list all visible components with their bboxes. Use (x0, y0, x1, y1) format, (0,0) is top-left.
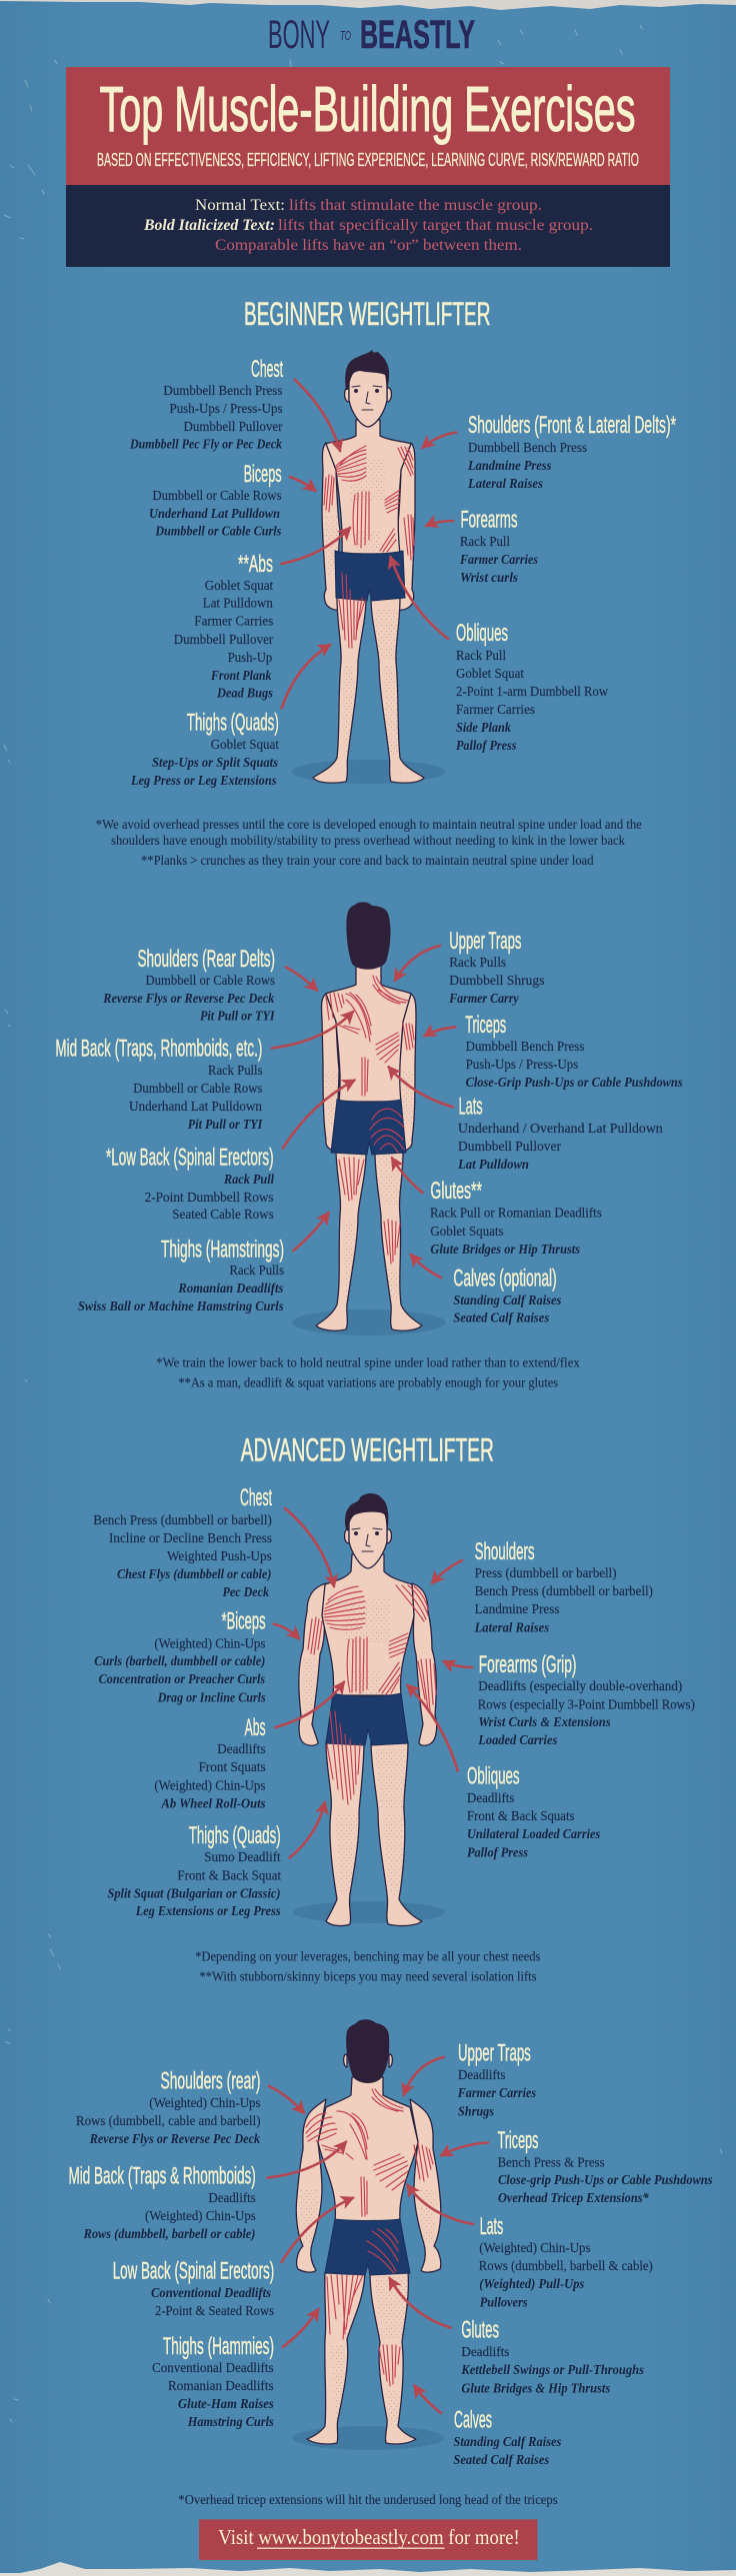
lift list: Deadlifts (208, 2191, 256, 2206)
navy legend band (66, 185, 670, 267)
lift list: Romanian Deadlifts (168, 2379, 274, 2394)
lift list: Dumbbell Shrugs (449, 974, 544, 989)
lift list (94, 1636, 266, 1705)
callout: shoulders rear advanced (76, 2067, 261, 2147)
callout: shoulders front (467, 412, 676, 492)
lift list: Dumbbell Bench Press (468, 441, 587, 456)
heading: calves: Calves (454, 2407, 492, 2434)
legend text (143, 197, 593, 254)
lift list: Concentration or Preacher Curls (99, 1672, 266, 1687)
lift list: Dumbbell or Cable Rows (146, 974, 275, 989)
right leg (371, 1742, 422, 1926)
lift list: Curls (barbell, dumbbell or cable) (94, 1654, 265, 1669)
shorts (326, 1693, 408, 1745)
heading: forearms: Forearms (460, 506, 518, 533)
lift list: Deadlifts (especially double-overhand) (478, 1679, 683, 1694)
hair (345, 350, 389, 390)
lift list (477, 1679, 695, 1748)
callout: biceps (149, 461, 282, 540)
callout: triceps advanced (498, 2127, 713, 2206)
heading: beginner weightlifter: BEGINNER WEIGHTLIFTER (244, 296, 490, 332)
left leg (307, 2272, 365, 2444)
lift list: Dumbbell or Cable Rows (152, 489, 282, 504)
lift list: Pit Pull or TYI (200, 1010, 275, 1025)
right arm (392, 443, 415, 610)
footnotes: beginner front (96, 818, 642, 869)
heading: abs: **Abs (238, 551, 273, 578)
hair (346, 902, 390, 970)
lift list: (Weighted) Chin-Ups (479, 2241, 590, 2256)
lift list: Goblet Squat (456, 667, 524, 682)
lift list: Conventional Deadlifts (151, 2286, 271, 2301)
lift list: Leg Extensions or Leg Press (135, 1904, 281, 1919)
lift list: Step-Ups or Split Squats (152, 756, 278, 771)
heading: triceps: Triceps (498, 2127, 538, 2154)
footnotes: beginner front: shoulders have enough mobility/stability to press overhead without needing to kink in the lower back (111, 834, 625, 849)
lift list: Dumbbell Pec Fly or Pec Deck (129, 438, 282, 452)
lift list: Incline or Decline Bench Press (109, 1531, 272, 1546)
ears (344, 388, 392, 402)
heading: hamstrings: Thighs (Hamstrings) (161, 1236, 284, 1263)
lift list: Underhand / Overhand Lat Pulldown (458, 1122, 663, 1137)
lift list: Deadlifts (217, 1742, 266, 1757)
lift list: Front Squats (199, 1760, 266, 1775)
lift list (154, 1742, 266, 1811)
lift list: Front & Back Squats (467, 1809, 574, 1824)
lift list: Rows (dumbbell, cable and barbell) (76, 2114, 261, 2129)
lift list (151, 2286, 274, 2319)
ears (344, 2054, 392, 2067)
lift list: Lat Pulldown (203, 597, 273, 612)
footnote: advanced back: *Overhead tricep extensions will hit the underused long head of the triceps (178, 2493, 558, 2508)
torso (318, 2077, 418, 2221)
heading: shoulders rear delts: Shoulders (Rear Delts) (138, 946, 275, 973)
callout: low back advanced (113, 2258, 274, 2319)
torso (326, 965, 411, 1102)
lift list: Bench Press (dumbbell or barbell) (475, 1584, 653, 1599)
lift list (466, 1040, 683, 1091)
callout: lats advanced (479, 2213, 653, 2310)
lift list: Glute-Ham Raises (178, 2397, 274, 2412)
lift list: Dead Bugs (216, 687, 273, 702)
lift list: Wrist curls (460, 571, 519, 586)
figure: beginner front (292, 350, 446, 784)
lift list: 2-Point & Seated Rows (155, 2304, 274, 2319)
footnotes: beginner back: **As a man, deadlift & squat variations are probably enough for your glutes (178, 1376, 558, 1391)
lift list: Drag or Incline Curls (157, 1690, 266, 1705)
lift list (453, 1293, 562, 1326)
lift list: Ab Wheel Roll-Outs (161, 1797, 266, 1811)
lift list (457, 1122, 663, 1173)
lift list: Hamstring Curls (187, 2415, 274, 2430)
body hair stipple (325, 460, 400, 755)
lift list: Leg Press or Leg Extensions (130, 774, 277, 789)
callout: forearms grip (477, 1651, 695, 1748)
lift list (474, 1566, 653, 1635)
lift list (461, 2345, 644, 2396)
lift list (459, 535, 538, 586)
lift list: Romanian Deadlifts (177, 1282, 284, 1296)
lift list: Rack Pulls (230, 1264, 284, 1279)
heading: shoulders: Shoulders (475, 1538, 535, 1565)
legend text: lifts that specifically target that muscle group. (278, 217, 593, 234)
shorts (325, 2219, 410, 2275)
arrows: beginner front (282, 380, 456, 708)
lift list: Sumo Deadlift (204, 1850, 281, 1865)
right arm (412, 1583, 437, 1745)
heading: mid back: Mid Back (Traps, Rhomboids, etc.) (55, 1036, 262, 1063)
lift list: Dumbbell or Cable Rows (133, 1082, 262, 1097)
call to action banner: Visit www.bonytobeastly.com for more! (218, 2525, 520, 2549)
lift list: Farmer Carries (194, 615, 273, 630)
lift list: Lateral Raises (474, 1620, 550, 1635)
lift list: Weighted Push-Ups (167, 1549, 272, 1564)
lift list: Dumbbell Pullover (184, 420, 283, 435)
lift list: Shrugs (458, 2104, 494, 2119)
lift list (479, 2241, 653, 2310)
callout: obliques (456, 620, 609, 754)
callout: thighs quads (130, 710, 279, 789)
shorts (331, 1100, 406, 1155)
lift list: Rows (dumbbell, barbell & cable) (479, 2259, 653, 2274)
muscle hatching (324, 446, 414, 648)
callout: mid back (55, 1036, 263, 1133)
lift list: Rows (especially 3-Point Dumbbell Rows) (478, 1697, 695, 1712)
heading: lats: Lats (480, 2213, 503, 2240)
lift list: Deadlifts (467, 1791, 514, 1806)
lift list (145, 1173, 274, 1223)
callout: biceps advanced (94, 1607, 266, 1705)
muscle hatching (326, 976, 414, 1264)
lift list: Dumbbell Pullover (174, 633, 274, 648)
lift list: Underhand Lat Pulldown (149, 507, 280, 522)
lift list (108, 1850, 281, 1919)
callout: calves optional (453, 1266, 562, 1326)
lift list (129, 1064, 263, 1133)
lift list (93, 1513, 272, 1600)
lift list: Close-Grip Push-Ups or Cable Pushdowns (466, 1076, 683, 1091)
lift list: 2-Point Dumbbell Rows (145, 1191, 274, 1206)
ground shadow (292, 2426, 444, 2450)
lift list: Rack Pull or Romanian Deadlifts (430, 1207, 602, 1222)
lift list (152, 2361, 274, 2430)
lift list (129, 384, 283, 452)
callout: chest advanced (93, 1484, 272, 1600)
lift list: Reverse Flys or Reverse Pec Deck (102, 992, 274, 1007)
lift list (467, 441, 587, 492)
lift list: Bench Press (dumbbell or barbell) (93, 1513, 272, 1528)
lift list: Rack Pulls (208, 1064, 262, 1079)
lift list: Front & Back Squat (177, 1868, 281, 1883)
lift list: Split Squat (Bulgarian or Classic) (108, 1886, 280, 1901)
lift list: Push-Up (228, 651, 272, 666)
call to action banner (199, 2519, 538, 2560)
right leg (371, 598, 424, 783)
heading: low back: *Low Back (Spinal Erectors) (106, 1145, 274, 1172)
callout: forearms (459, 506, 538, 586)
callout: chest (129, 356, 283, 452)
lift list: Pit Pull or TYI (188, 1118, 263, 1133)
lift list: Rack Pull (456, 649, 506, 664)
lift list: Chest Flys (dumbbell or cable) (117, 1567, 271, 1582)
logo: Bony to Beastly: BEASTLY (360, 13, 475, 57)
heading: glutes: Glutes** (430, 1178, 482, 1205)
lift list: Front Plank (210, 669, 272, 684)
callout: quads advanced (108, 1822, 281, 1919)
lift list (456, 649, 609, 754)
red title band (66, 67, 670, 185)
lift list: Loaded Carries (477, 1733, 558, 1748)
torn paper edge: bottom (0, 2562, 736, 2576)
callout: upper traps advanced (457, 2039, 537, 2119)
footnotes: beginner front: **Planks > crunches as they train your core and back to maintain neutral spine under load (141, 854, 594, 869)
muscle hatching (306, 2089, 433, 2386)
callout: mid back advanced (68, 2163, 256, 2242)
figure: beginner back (292, 902, 446, 1335)
heading: upper traps: Upper Traps (458, 2039, 531, 2067)
callout: glutes advanced (461, 2317, 644, 2396)
lift list: Farmer Carry (448, 992, 519, 1007)
footnotes: beginner back: *We train the lower back to hold neutral spine under load rather than to extend/flex (156, 1356, 580, 1371)
lift list: Dumbbell Bench Press (163, 384, 282, 399)
callout: triceps (465, 1012, 683, 1091)
lift list: Seated Calf Raises (453, 2453, 550, 2468)
heading: calves: Calves (optional) (453, 1266, 557, 1292)
title panel (66, 67, 670, 267)
lift list: Kettlebell Swings or Pull-Throughs (461, 2363, 644, 2378)
callout: low back (106, 1145, 274, 1223)
heading: mid back: Mid Back (Traps & Rhomboids) (68, 2163, 256, 2190)
lift list: Farmer Carries (456, 703, 535, 718)
heading: forearms: Forearms (Grip) (479, 1651, 576, 1678)
lift list: (Weighted) Pull-Ups (479, 2277, 585, 2292)
heading: triceps: Triceps (465, 1012, 506, 1039)
legend text: Normal Text: (195, 197, 285, 214)
footnotes: advanced front: **With stubborn/skinny biceps you may need several isolation lifts (200, 1969, 536, 1984)
lift list (102, 974, 275, 1025)
lift list (430, 1207, 602, 1258)
lift list: Rack Pulls (449, 956, 506, 971)
callout: lats (457, 1094, 663, 1173)
lift list: Unilateral Loaded Carries (467, 1827, 601, 1842)
legend text: Comparable lifts have an “or” between them. (215, 237, 522, 254)
face (349, 1509, 387, 1568)
left leg (326, 1742, 364, 1926)
torso (322, 1554, 414, 1695)
lift list: Bench Press & Press (498, 2155, 605, 2170)
torso (326, 420, 411, 554)
heading: chest: Chest (240, 1484, 272, 1511)
heading: low back: Low Back (Spinal Erectors) (113, 2258, 274, 2285)
lift list: Rows (dumbbell, barbell or cable) (83, 2227, 255, 2242)
lift list: Wrist Curls & Extensions (478, 1715, 611, 1730)
shorts (335, 551, 405, 601)
heading: thighs: Thighs (Quads) (189, 1822, 281, 1849)
lift list: Lateral Raises (467, 477, 543, 492)
lift list: Underhand Lat Pulldown (129, 1100, 262, 1115)
lift list: (Weighted) Chin-Ups (154, 1778, 265, 1793)
lift list (448, 956, 544, 1007)
lift list: Overhead Tricep Extensions* (498, 2191, 650, 2206)
lift list: 2-Point 1-arm Dumbbell Row (456, 685, 609, 700)
callout: abs advanced (154, 1714, 266, 1811)
heading: thighs: Thighs (Quads) (187, 710, 279, 736)
figure: advanced back (292, 2019, 444, 2450)
lift list (498, 2155, 713, 2206)
lift list (174, 579, 274, 702)
lift list: Farmer Carries (457, 2086, 537, 2101)
heading: upper traps: Upper Traps (449, 928, 522, 955)
lift list (78, 1264, 284, 1314)
lift list (467, 1791, 601, 1860)
arrows: advanced front (274, 1508, 472, 1857)
heading: glutes: Glutes (461, 2317, 499, 2344)
lift list: Landmine Press (467, 459, 552, 474)
logo: Bony to Beastly: BONY (268, 13, 330, 57)
heading: biceps: Biceps (244, 461, 282, 488)
lift list: Push-Ups / Press-Ups (170, 402, 282, 417)
callout: hamstrings (78, 1236, 284, 1314)
footnotes: beginner front: *We avoid overhead presses until the core is developed enough to maintain neutral spine under load and the (96, 818, 642, 833)
ears (344, 1529, 392, 1543)
lift list: Rack Pull (460, 535, 510, 550)
hair (346, 2019, 389, 2083)
lift list: Push-Ups / Press-Ups (466, 1058, 578, 1073)
footnotes: beginner back (156, 1356, 580, 1391)
lift list: Seated Calf Raises (453, 1311, 550, 1326)
logo: Bony to Beastly: TO (340, 28, 351, 43)
callout: hammies (152, 2333, 274, 2430)
lift list: Pallof Press (456, 739, 517, 754)
lift list: Side Plank (456, 721, 511, 736)
callout: shoulders advanced (474, 1538, 653, 1635)
left leg (316, 1153, 366, 1330)
face (349, 368, 387, 427)
heading: obliques: Obliques (456, 620, 508, 647)
lift list: Reverse Flys or Reverse Pec Deck (89, 2132, 260, 2147)
lift list: Goblet Squats (430, 1225, 504, 1240)
ground shadow (292, 760, 446, 784)
body hair stipple (300, 2189, 436, 2425)
callout: abs (174, 551, 274, 702)
facial features (352, 1528, 382, 1551)
lift list: Farmer Carries (459, 553, 538, 568)
hair (345, 1493, 388, 1531)
lift list: Landmine Press (475, 1602, 560, 1617)
lift list (453, 2435, 562, 2468)
lift list: Lat Pulldown (457, 1158, 529, 1173)
right arm (410, 2099, 441, 2272)
lift list: (Weighted) Chin-Ups (145, 2209, 256, 2224)
torn paper edge: top (0, 0, 736, 10)
figure: advanced front (293, 1493, 445, 1926)
arrows: advanced back (268, 2057, 488, 2413)
body hair stipple (302, 1599, 406, 1894)
logo: Bony to Beastly (268, 13, 475, 57)
lift list: Press (dumbbell or barbell) (475, 1566, 617, 1581)
legend text: lifts that stimulate the muscle group. (289, 197, 542, 214)
muscle hatching (308, 1585, 436, 1804)
ground shadow (293, 1901, 445, 1923)
heading: advanced weightlifter: ADVANCED WEIGHTLIFTER (241, 1431, 494, 1467)
lift list (130, 738, 279, 789)
lift list: Goblet Squat (211, 738, 279, 753)
legend text: Bold Italicized Text: (143, 217, 275, 234)
arrows: beginner back (272, 946, 455, 1278)
callout: shoulders rear (102, 946, 275, 1025)
lift list: Swiss Ball or Machine Hamstring Curls (78, 1299, 284, 1314)
lift list: Goblet Squat (205, 579, 273, 594)
lift list: Standing Calf Raises (453, 2435, 562, 2450)
heading: biceps: *Biceps (222, 1607, 266, 1634)
lift list: Dumbbell Pullover (458, 1140, 561, 1155)
right leg (370, 2272, 416, 2444)
left arm (299, 1583, 326, 1745)
lift list: Pallof Press (467, 1845, 528, 1860)
left leg (313, 598, 366, 783)
lift list: Conventional Deadlifts (152, 2361, 274, 2376)
ground shadow (292, 1309, 446, 1335)
lift list (76, 2096, 261, 2147)
lift list: Deadlifts (461, 2345, 509, 2360)
callout: upper traps (448, 928, 544, 1007)
heading: thighs hammies: Thighs (Hammies) (163, 2333, 274, 2360)
footnotes: advanced front (195, 1949, 540, 1984)
heading: obliques: Obliques (467, 1763, 520, 1789)
lift list (457, 2068, 537, 2119)
right arm (392, 994, 416, 1151)
footnotes: advanced front: *Depending on your leverages, benching may be all your chest needs (195, 1949, 540, 1964)
left arm (296, 2099, 326, 2272)
callout: glutes (430, 1178, 602, 1258)
lift list: Dumbbell or Cable Curls (155, 525, 282, 540)
heading: chest: Chest (251, 356, 283, 383)
heading: lats: Lats (459, 1094, 483, 1120)
lift list: Close-grip Push-Ups or Cable Pushdowns (498, 2173, 713, 2188)
lift list: (Weighted) Chin-Ups (154, 1636, 265, 1651)
facial features (352, 386, 382, 410)
arms (322, 443, 346, 610)
lift list: Dumbbell Bench Press (466, 1040, 584, 1055)
lift list: Seated Cable Rows (172, 1208, 274, 1223)
lift list: Pec Deck (222, 1585, 269, 1600)
lift list: (Weighted) Chin-Ups (149, 2096, 260, 2111)
lift list: Rack Pull (223, 1173, 274, 1188)
right leg (375, 1153, 422, 1330)
left arm (321, 994, 345, 1151)
heading: abs: Abs (245, 1714, 266, 1741)
heading: shoulders rear: Shoulders (rear) (160, 2067, 260, 2094)
body hair stipple (325, 1070, 413, 1299)
callout: obliques advanced (467, 1763, 601, 1860)
lift list: Deadlifts (458, 2068, 505, 2083)
lift list: Glute Bridges & Hip Thrusts (461, 2381, 611, 2396)
lift list: Pullovers (480, 2295, 528, 2310)
lift list: Standing Calf Raises (453, 1293, 562, 1308)
lift list: Glute Bridges or Hip Thrusts (430, 1243, 581, 1258)
lift list (83, 2191, 256, 2242)
lift list (149, 489, 282, 540)
callout: calves advanced (453, 2407, 562, 2468)
